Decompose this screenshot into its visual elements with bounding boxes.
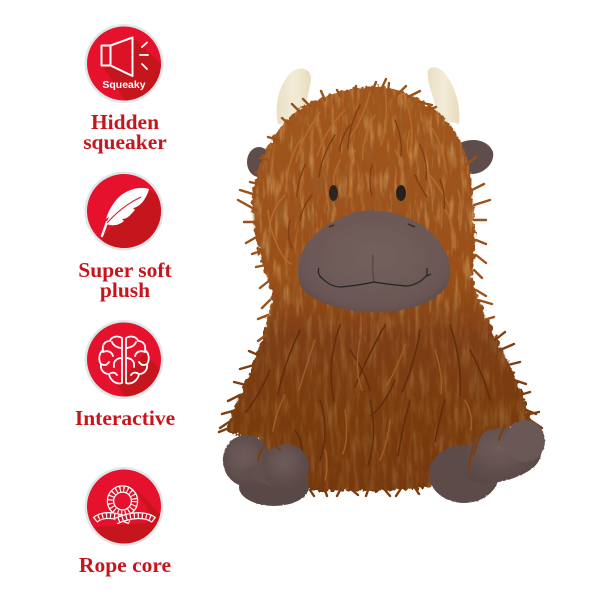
left paw [217,430,309,506]
label: hidden squeaker: Hidden [91,110,159,134]
edge hair body [219,332,542,496]
icon: speaker badge: Squeaky [102,79,146,91]
body fur shadows [246,325,490,472]
muzzle [298,210,450,312]
icon: brain badge [84,320,164,399]
icon: rope badge [84,467,164,546]
left ear [247,147,271,177]
right ear [458,140,493,174]
right horn [428,67,459,124]
plush highland cow toy [215,67,545,506]
body fur highlights [273,340,471,480]
mouth stitching [318,268,431,287]
fur tufts over paws [258,426,505,470]
head fur strands [268,88,462,264]
nostrils [329,224,415,227]
icon: feather badge [84,172,164,250]
feature: super soft plush [78,172,175,302]
shaggy fur body [215,75,545,500]
right eye [396,185,406,201]
feature: hidden squeaker [83,24,175,154]
edge hair head [238,79,494,341]
feature: interactive [75,320,175,430]
head fur shadows [288,105,444,248]
label: rope core: Rope core [79,553,171,577]
feature: rope core [79,467,175,577]
left horn [277,69,311,125]
left eye [329,185,338,201]
muzzle seam [373,255,374,282]
label: hidden squeaker: squeaker [83,130,167,154]
right paw [429,420,545,503]
label: super soft plush: plush [100,278,150,302]
label: super soft plush: Super soft [78,258,173,282]
label: interactive: Interactive [75,406,175,430]
